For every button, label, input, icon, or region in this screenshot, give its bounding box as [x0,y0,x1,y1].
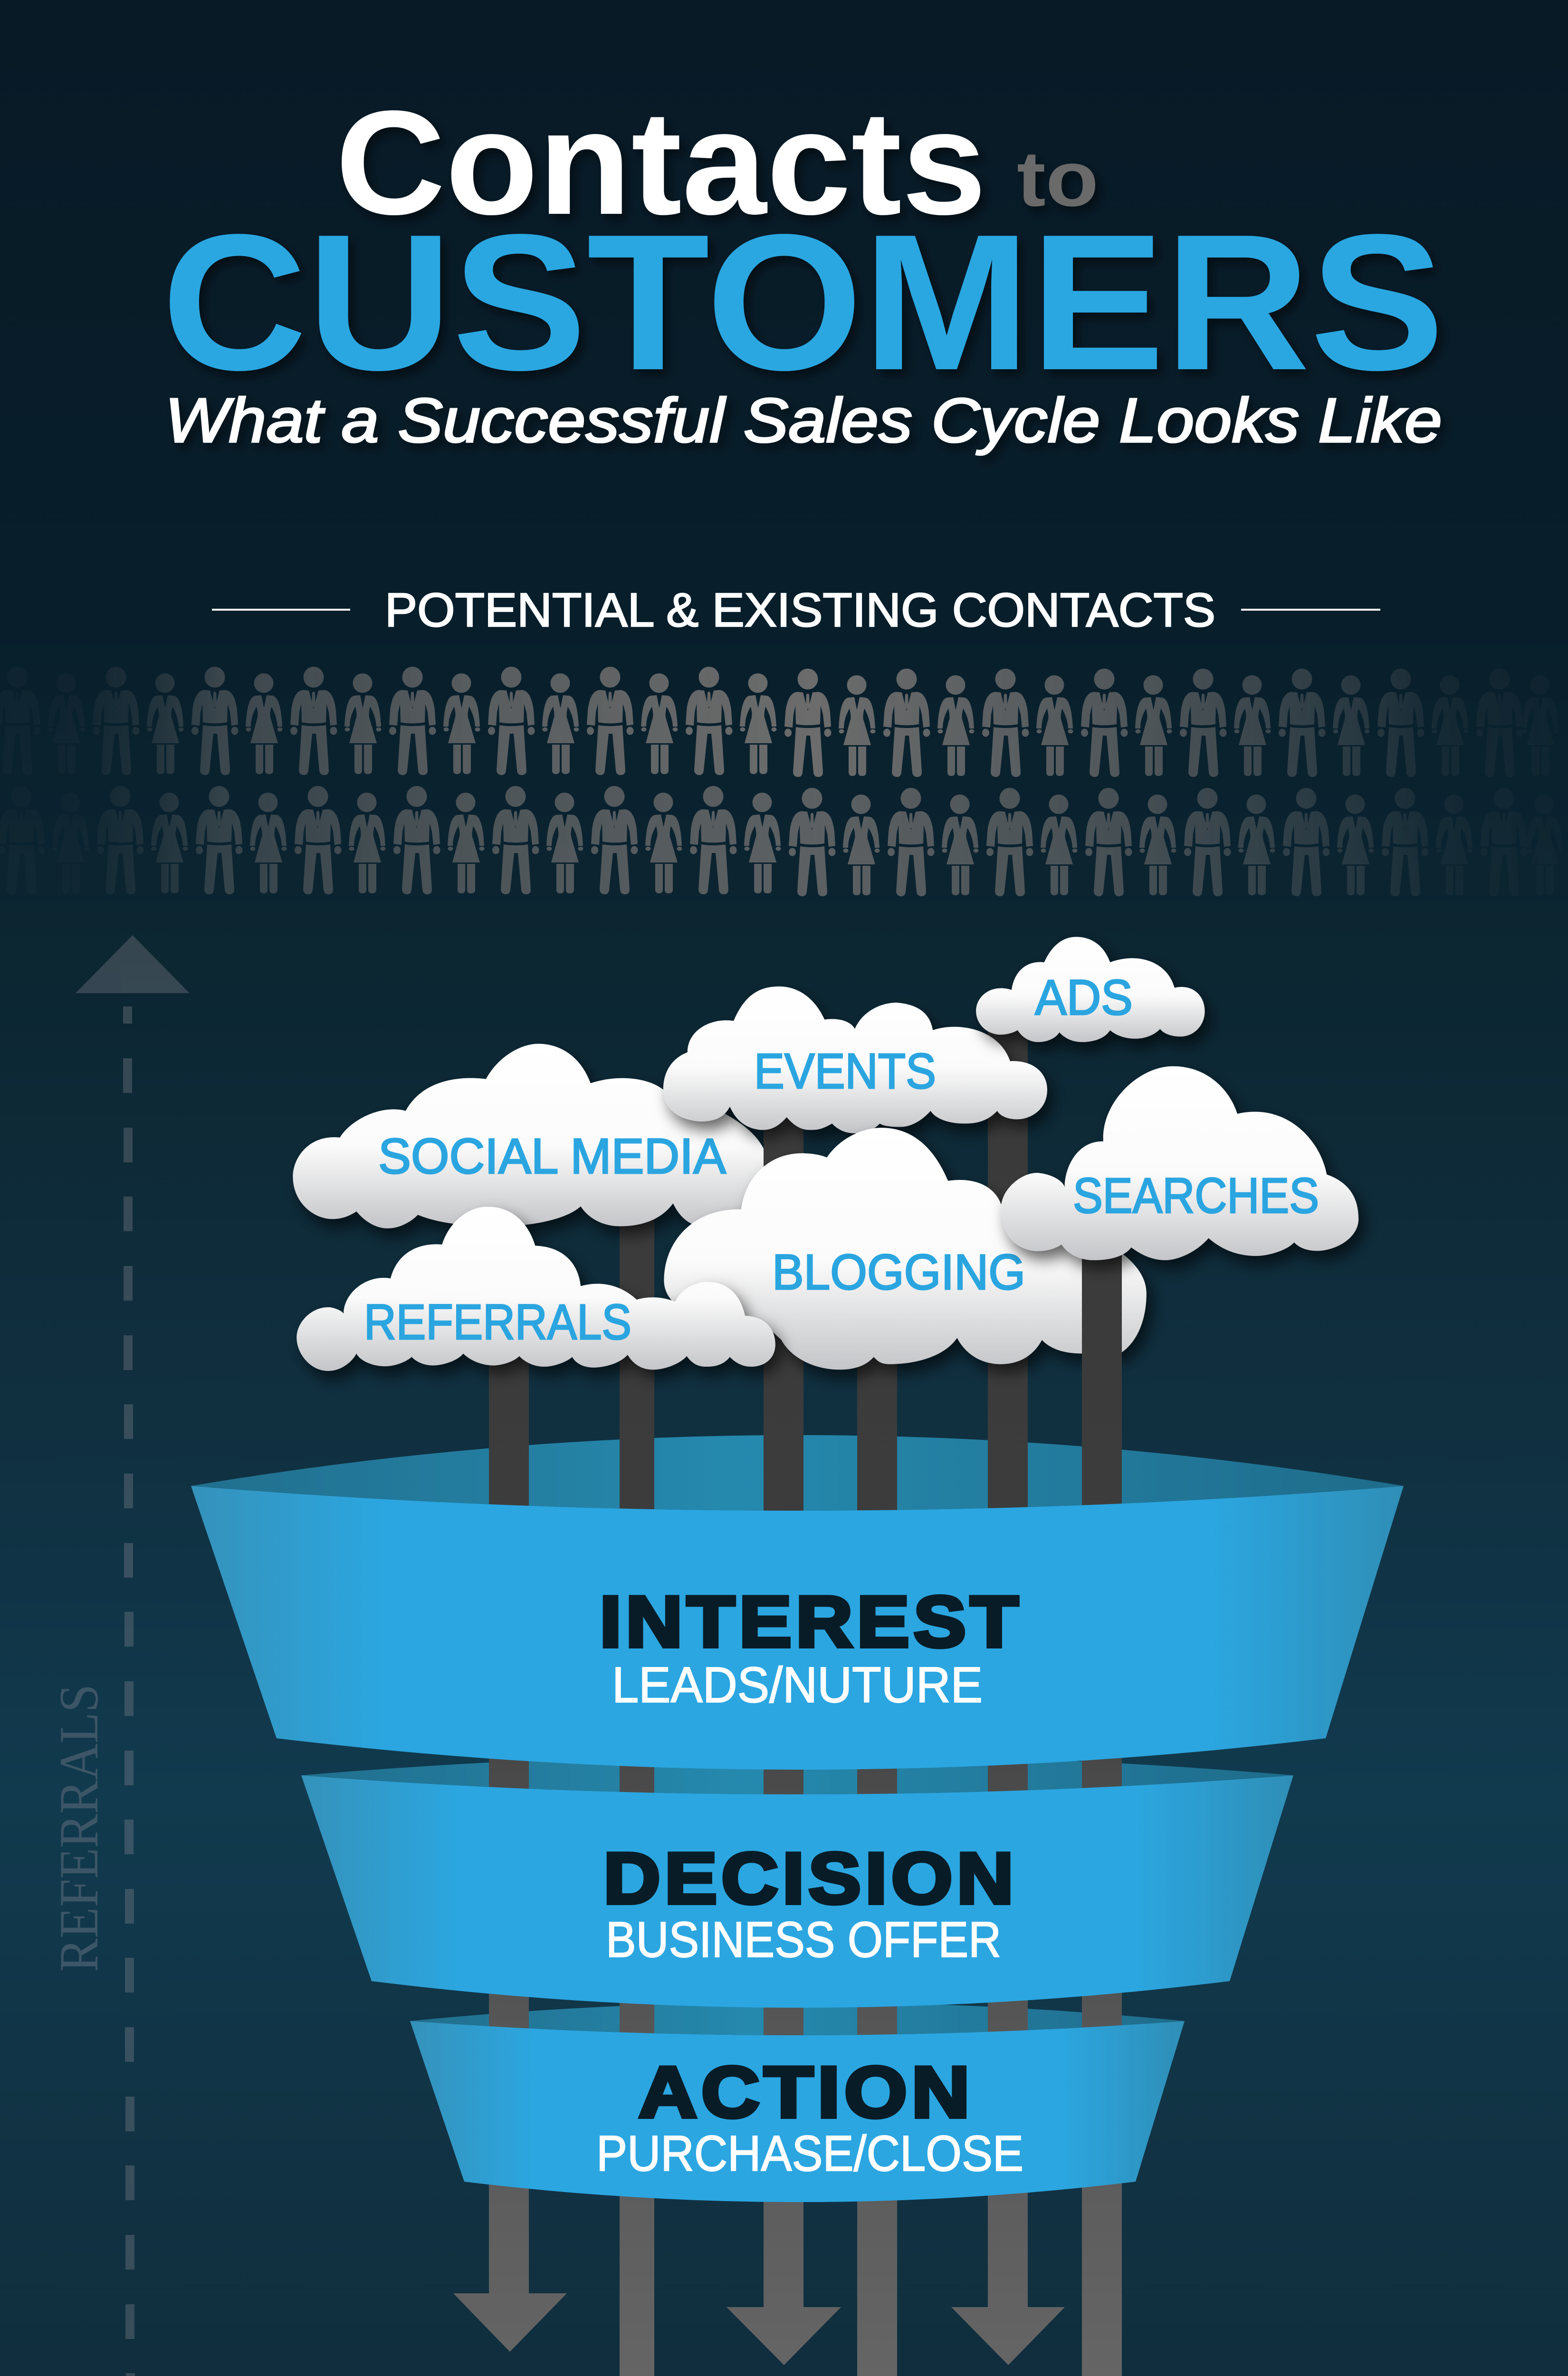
funnel tier: interest: INTEREST [600,1581,1023,1662]
funnel tier: decision: BUSINESS OFFER [606,1912,1001,1968]
people row 2 [97,786,1472,896]
cloud: searches [1001,1066,1358,1260]
stream 3 with arrow [727,1093,841,2365]
cloud: ads: ADS [1035,970,1133,1025]
funnel tier: decision: DECISION [603,1838,1018,1919]
heading: to: to [1017,135,1099,222]
cloud: blogging [664,1128,1147,1370]
stream 1 with arrow [453,1331,567,2352]
people row 1 [0,667,1558,777]
referrals vertical label: REFERRALS [48,1684,110,1972]
funnel tier: action [410,2021,1185,2202]
cloud: searches: SEARCHES [1073,1168,1319,1224]
title block [162,80,1444,455]
stream 2 with arrow [580,1188,693,2376]
cloud: referrals [296,1207,775,1371]
stream 5 with arrow [951,998,1065,2365]
stream 4 with arrow [820,1331,934,2376]
funnel tier: decision [301,1775,1293,2008]
heading: CUSTOMERS: CUSTOMERS [162,194,1444,411]
funnel tier: action: PURCHASE/CLOSE [596,2126,1023,2182]
section heading: potential and existing contacts [212,584,1380,637]
heading: Contacts: Contacts [335,80,986,246]
funnel tier: interest [191,1486,1404,1770]
cloud: blogging: BLOGGING [772,1245,1025,1300]
cloud: events [663,987,1047,1133]
cloud: referrals: REFERRALS [364,1294,631,1350]
funnel back rims [191,1435,1404,2035]
referrals loop: dashed arrow [76,935,514,2376]
stream 6 with arrow [1048,1236,1161,2376]
cloud: ads [976,937,1205,1042]
funnel tier: action: ACTION [639,2052,974,2133]
cloud: events: EVENTS [754,1044,936,1099]
section heading: potential and existing contacts: POTENTIAL & EXISTING CONTACTS [385,584,1215,637]
cloud: social media: SOCIAL MEDIA [378,1129,726,1184]
funnel tier: interest: LEADS/NUTURE [612,1657,983,1713]
cloud: social media [293,1044,768,1228]
subtitle: What a Successful Sales Cycle Looks Like [165,385,1442,455]
